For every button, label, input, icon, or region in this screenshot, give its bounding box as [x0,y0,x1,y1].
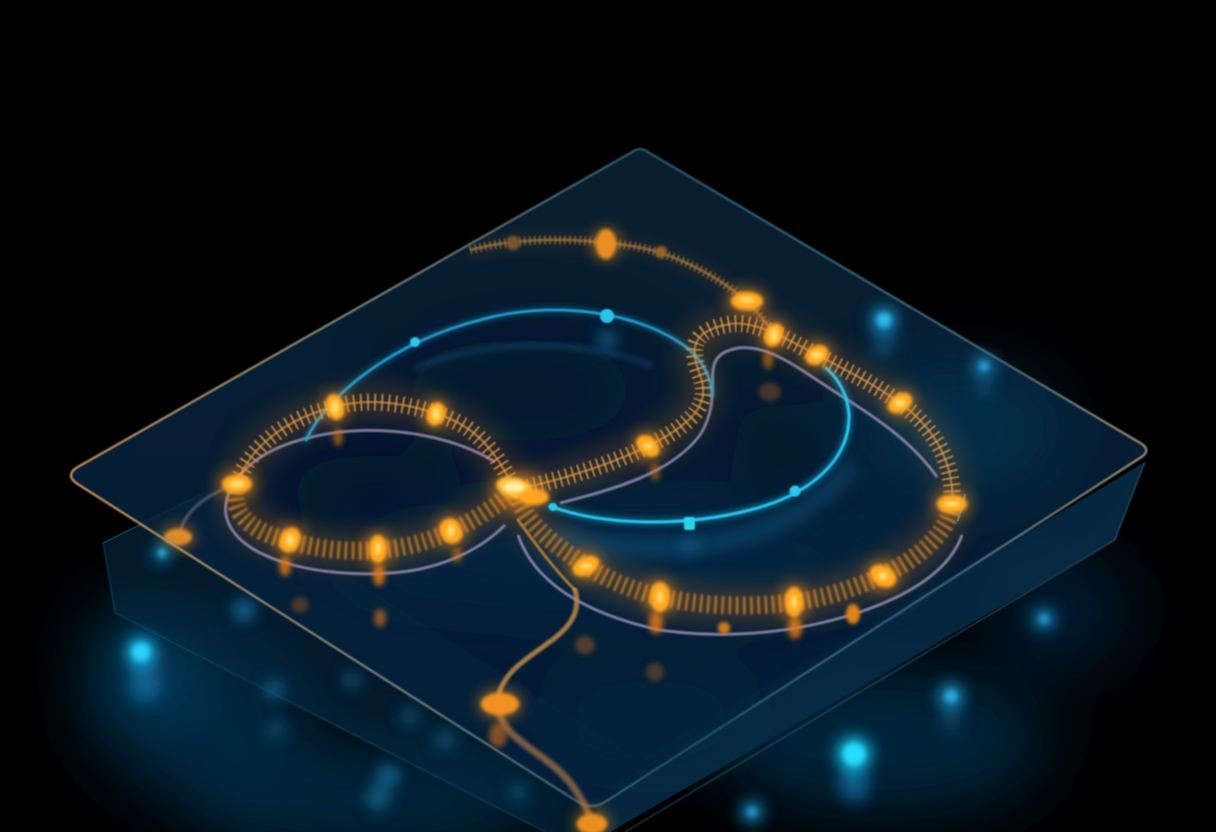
lower glass slab [103,462,1145,832]
ambient blue floor glow [90,550,1130,832]
plate lighting [280,340,1060,760]
orange node reflections [279,351,802,747]
bright blue dot cores [132,313,1049,817]
feed lines [178,484,592,825]
orange node cores [164,229,967,832]
blue waveguide arcs [306,310,965,547]
hot highlights [229,297,960,609]
blue waveguide nodes [410,309,800,530]
far coil sections with fine ticks [237,323,952,504]
near coil sections with thick blurred ticks [235,484,952,605]
reflected lilac waveguides [226,348,962,634]
glass plate [71,149,1146,806]
orange node halos [163,229,969,832]
blue glow dots with reflection tails [126,308,1055,823]
upper dim coil strand [470,240,775,335]
orange coil glow [235,240,952,605]
